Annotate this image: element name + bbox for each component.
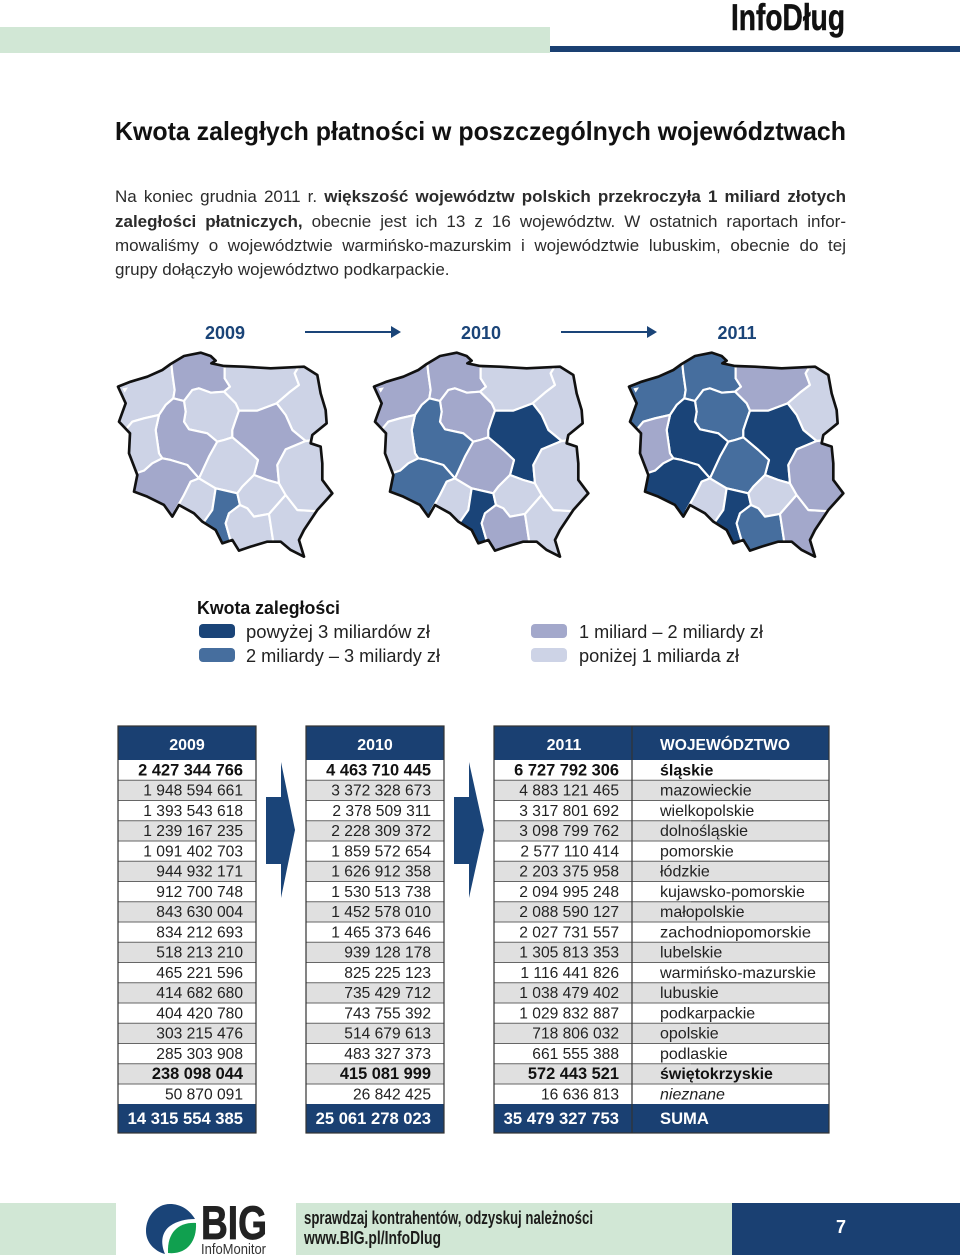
table column 2010: 2 378 509 311 [332, 803, 431, 820]
table column 2009: 1 091 402 703 [143, 844, 243, 860]
table column 2011 with voivodeship names: 1 038 479 402 [519, 985, 619, 1002]
table column 2010: 1 452 578 010 [331, 904, 431, 921]
table column 2010: 4 463 710 445 [326, 762, 431, 780]
legend label: 1 to 2 billion: 1 miliard – 2 miliardy zł [579, 622, 763, 642]
table column 2010: 743 755 392 [344, 1006, 431, 1022]
year label 2011: 2011 [717, 323, 757, 343]
table column 2009: 303 215 476 [156, 1026, 243, 1043]
footer tagline: www.BIG.pl/InfoDlug [303, 1228, 441, 1248]
table column 2011 with voivodeship names: dolnośląskie [660, 823, 748, 840]
legend label: 2 to 3 billion: 2 miliardy – 3 miliardy zł [246, 646, 440, 666]
footer band: tagline green [296, 1203, 732, 1255]
map 2009 [111, 347, 337, 563]
arrow 2009 to 2010 [305, 326, 401, 338]
table column 2009: 14 315 554 385 [128, 1109, 243, 1128]
arrow between 2009 and 2010 tables [266, 762, 295, 898]
legend swatch: below 1 billion [531, 648, 567, 662]
year label 2010: 2010 [461, 323, 501, 343]
footer band: left green [0, 1203, 116, 1255]
footer tagline: sprawdzaj kontrahentów, odzyskuj należności [304, 1208, 593, 1228]
page number: 7 [836, 1217, 846, 1237]
table column 2011 with voivodeship names: lubuskie [660, 985, 719, 1002]
table column 2011 with voivodeship names: 35 479 327 753 [504, 1109, 619, 1128]
table column 2011 with voivodeship names: 572 443 521 [528, 1065, 619, 1083]
table column 2011 with voivodeship names: 2 577 110 414 [520, 844, 619, 860]
table column 2011 with voivodeship names: podlaskie [660, 1046, 728, 1063]
logo: BIG InfoMonitor [146, 1196, 267, 1256]
table column 2011 with voivodeship names: kujawsko-pomorskie [660, 884, 805, 901]
map 2010 [367, 347, 593, 563]
table column 2011 with voivodeship names: 16 636 813 [541, 1086, 619, 1104]
table column 2011 with voivodeship names: świętokrzyskie [660, 1066, 773, 1083]
table column 2010: 939 128 178 [344, 945, 431, 962]
table column 2009: 414 682 680 [156, 985, 243, 1002]
table column 2011 with voivodeship names: 718 806 032 [532, 1026, 619, 1043]
table column 2011 with voivodeship names: nieznane [660, 1086, 725, 1104]
table column 2010: 2 228 309 372 [331, 823, 431, 840]
table column 2011 with voivodeship names: pomorskie [660, 844, 734, 860]
footer band: blue [732, 1203, 960, 1255]
table column 2011 with voivodeship names: 1 305 813 353 [519, 945, 619, 962]
legend label: above 3 billion: powyżej 3 miliardów zł [246, 622, 430, 642]
table column 2010: 1 465 373 646 [331, 924, 431, 942]
logo mark: green leaf [168, 1223, 196, 1253]
table column 2010: 1 626 912 358 [331, 864, 431, 881]
header band: blue [550, 46, 960, 52]
table column 2010: 735 429 712 [344, 985, 431, 1002]
table column 2011 with voivodeship names: 661 555 388 [532, 1046, 619, 1063]
table column 2009: 238 098 044 [152, 1065, 244, 1083]
legend swatch: 2 to 3 billion [199, 648, 235, 662]
table column 2011 with voivodeship names: zachodniopomorskie [660, 924, 811, 942]
table column 2009: 1 393 543 618 [143, 803, 243, 820]
table column 2010 [306, 726, 444, 1133]
table column 2011 with voivodeship names: podkarpackie [660, 1006, 755, 1022]
table column 2011 with voivodeship names: 2011 [547, 737, 581, 754]
table column 2011 with voivodeship names: 2 027 731 557 [519, 924, 619, 942]
table column 2009: 50 870 091 [165, 1086, 243, 1104]
table column 2009: 944 932 171 [156, 864, 243, 881]
table column 2010: 25 061 278 023 [316, 1109, 431, 1128]
legend title: Kwota zaległości [197, 598, 340, 618]
table column 2011 with voivodeship names: 1 116 441 826 [520, 965, 619, 982]
table column 2010: 1 530 513 738 [331, 884, 431, 901]
table column 2011 with voivodeship names: 2 094 995 248 [519, 884, 619, 901]
table column 2009: 1 948 594 661 [143, 783, 243, 800]
table column 2009: 912 700 748 [156, 884, 243, 901]
table column 2010: 825 225 123 [344, 965, 431, 982]
table column 2011 with voivodeship names [494, 726, 829, 1133]
table column 2009: 2 427 344 766 [138, 762, 243, 780]
table column 2009: 843 630 004 [156, 904, 243, 921]
table column 2009 [118, 726, 256, 1133]
table column 2010: 1 859 572 654 [331, 844, 431, 860]
table column 2010: 2010 [357, 737, 393, 754]
table column 2011 with voivodeship names: 6 727 792 306 [514, 762, 619, 780]
header band: green [0, 27, 550, 53]
table column 2010: 3 372 328 673 [331, 783, 431, 800]
table column 2011 with voivodeship names: śląskie [660, 762, 713, 780]
table column 2009: 518 213 210 [156, 945, 243, 962]
table column 2011 with voivodeship names: małopolskie [660, 904, 745, 921]
legend label: below 1 billion: poniżej 1 miliarda zł [579, 646, 739, 666]
legend swatch: 1 to 2 billion [531, 624, 567, 638]
intro paragraph: grupy dołączyło województwo podkarpackie. [115, 260, 450, 279]
table column 2009: 404 420 780 [156, 1006, 243, 1022]
table column 2011 with voivodeship names: 2 088 590 127 [519, 904, 619, 921]
table column 2011 with voivodeship names: warmińsko-mazurskie [659, 965, 816, 982]
table column 2011 with voivodeship names: 3 098 799 762 [519, 823, 619, 840]
legend swatch: above 3 billion [199, 624, 235, 638]
table column 2010: 514 679 613 [344, 1026, 431, 1043]
table column 2011 with voivodeship names: 3 317 801 692 [519, 803, 619, 820]
table column 2010: 26 842 425 [353, 1086, 431, 1104]
map 2011 [622, 347, 848, 563]
logo wordmark: BIG [201, 1196, 267, 1249]
intro paragraph [115, 187, 846, 279]
table column 2010: 483 327 373 [344, 1046, 431, 1063]
table column 2010: 415 081 999 [340, 1065, 431, 1083]
table column 2011 with voivodeship names: łódzkie [660, 864, 710, 881]
intro paragraph: zaległości płatniczych, obecnie jest ich 13 z 16 województw. W ostatnich raportach infor- [115, 212, 846, 231]
table column 2011 with voivodeship names: wielkopolskie [659, 803, 754, 820]
title: Kwota zaległych płatności w poszczególnych województwach [115, 116, 846, 146]
table column 2009: 1 239 167 235 [143, 823, 243, 840]
table column 2009: 285 303 908 [156, 1046, 243, 1063]
legend [197, 598, 763, 666]
table column 2011 with voivodeship names: 1 029 832 887 [519, 1006, 619, 1022]
footer tagline [303, 1208, 593, 1248]
table column 2011 with voivodeship names: 2 203 375 958 [519, 864, 619, 881]
table column 2009: 465 221 596 [156, 965, 243, 982]
table column 2011 with voivodeship names: SUMA [660, 1109, 709, 1128]
table column 2011 with voivodeship names: 4 883 121 465 [519, 783, 619, 800]
table column 2011 with voivodeship names: mazowieckie [660, 783, 752, 800]
year label 2009: 2009 [205, 323, 245, 343]
table column 2009: 2009 [169, 737, 205, 754]
arrow 2010 to 2011 [561, 326, 657, 338]
intro paragraph: mowaliśmy o województwie warmińsko-mazurskim i województwie lubuskim, obecnie do tej [115, 236, 846, 255]
table column 2009: 834 212 693 [156, 924, 243, 942]
table column 2011 with voivodeship names: WOJEWÓDZTWO [660, 735, 790, 754]
intro paragraph: Na koniec grudnia 2011 r. większość województw polskich przekroczyła 1 miliard złotych [115, 187, 846, 206]
arrow between 2010 and 2011 tables [454, 762, 484, 898]
table column 2011 with voivodeship names: lubelskie [660, 945, 722, 962]
table column 2011 with voivodeship names: opolskie [660, 1026, 719, 1043]
logo mark: blue crescent [146, 1204, 195, 1254]
